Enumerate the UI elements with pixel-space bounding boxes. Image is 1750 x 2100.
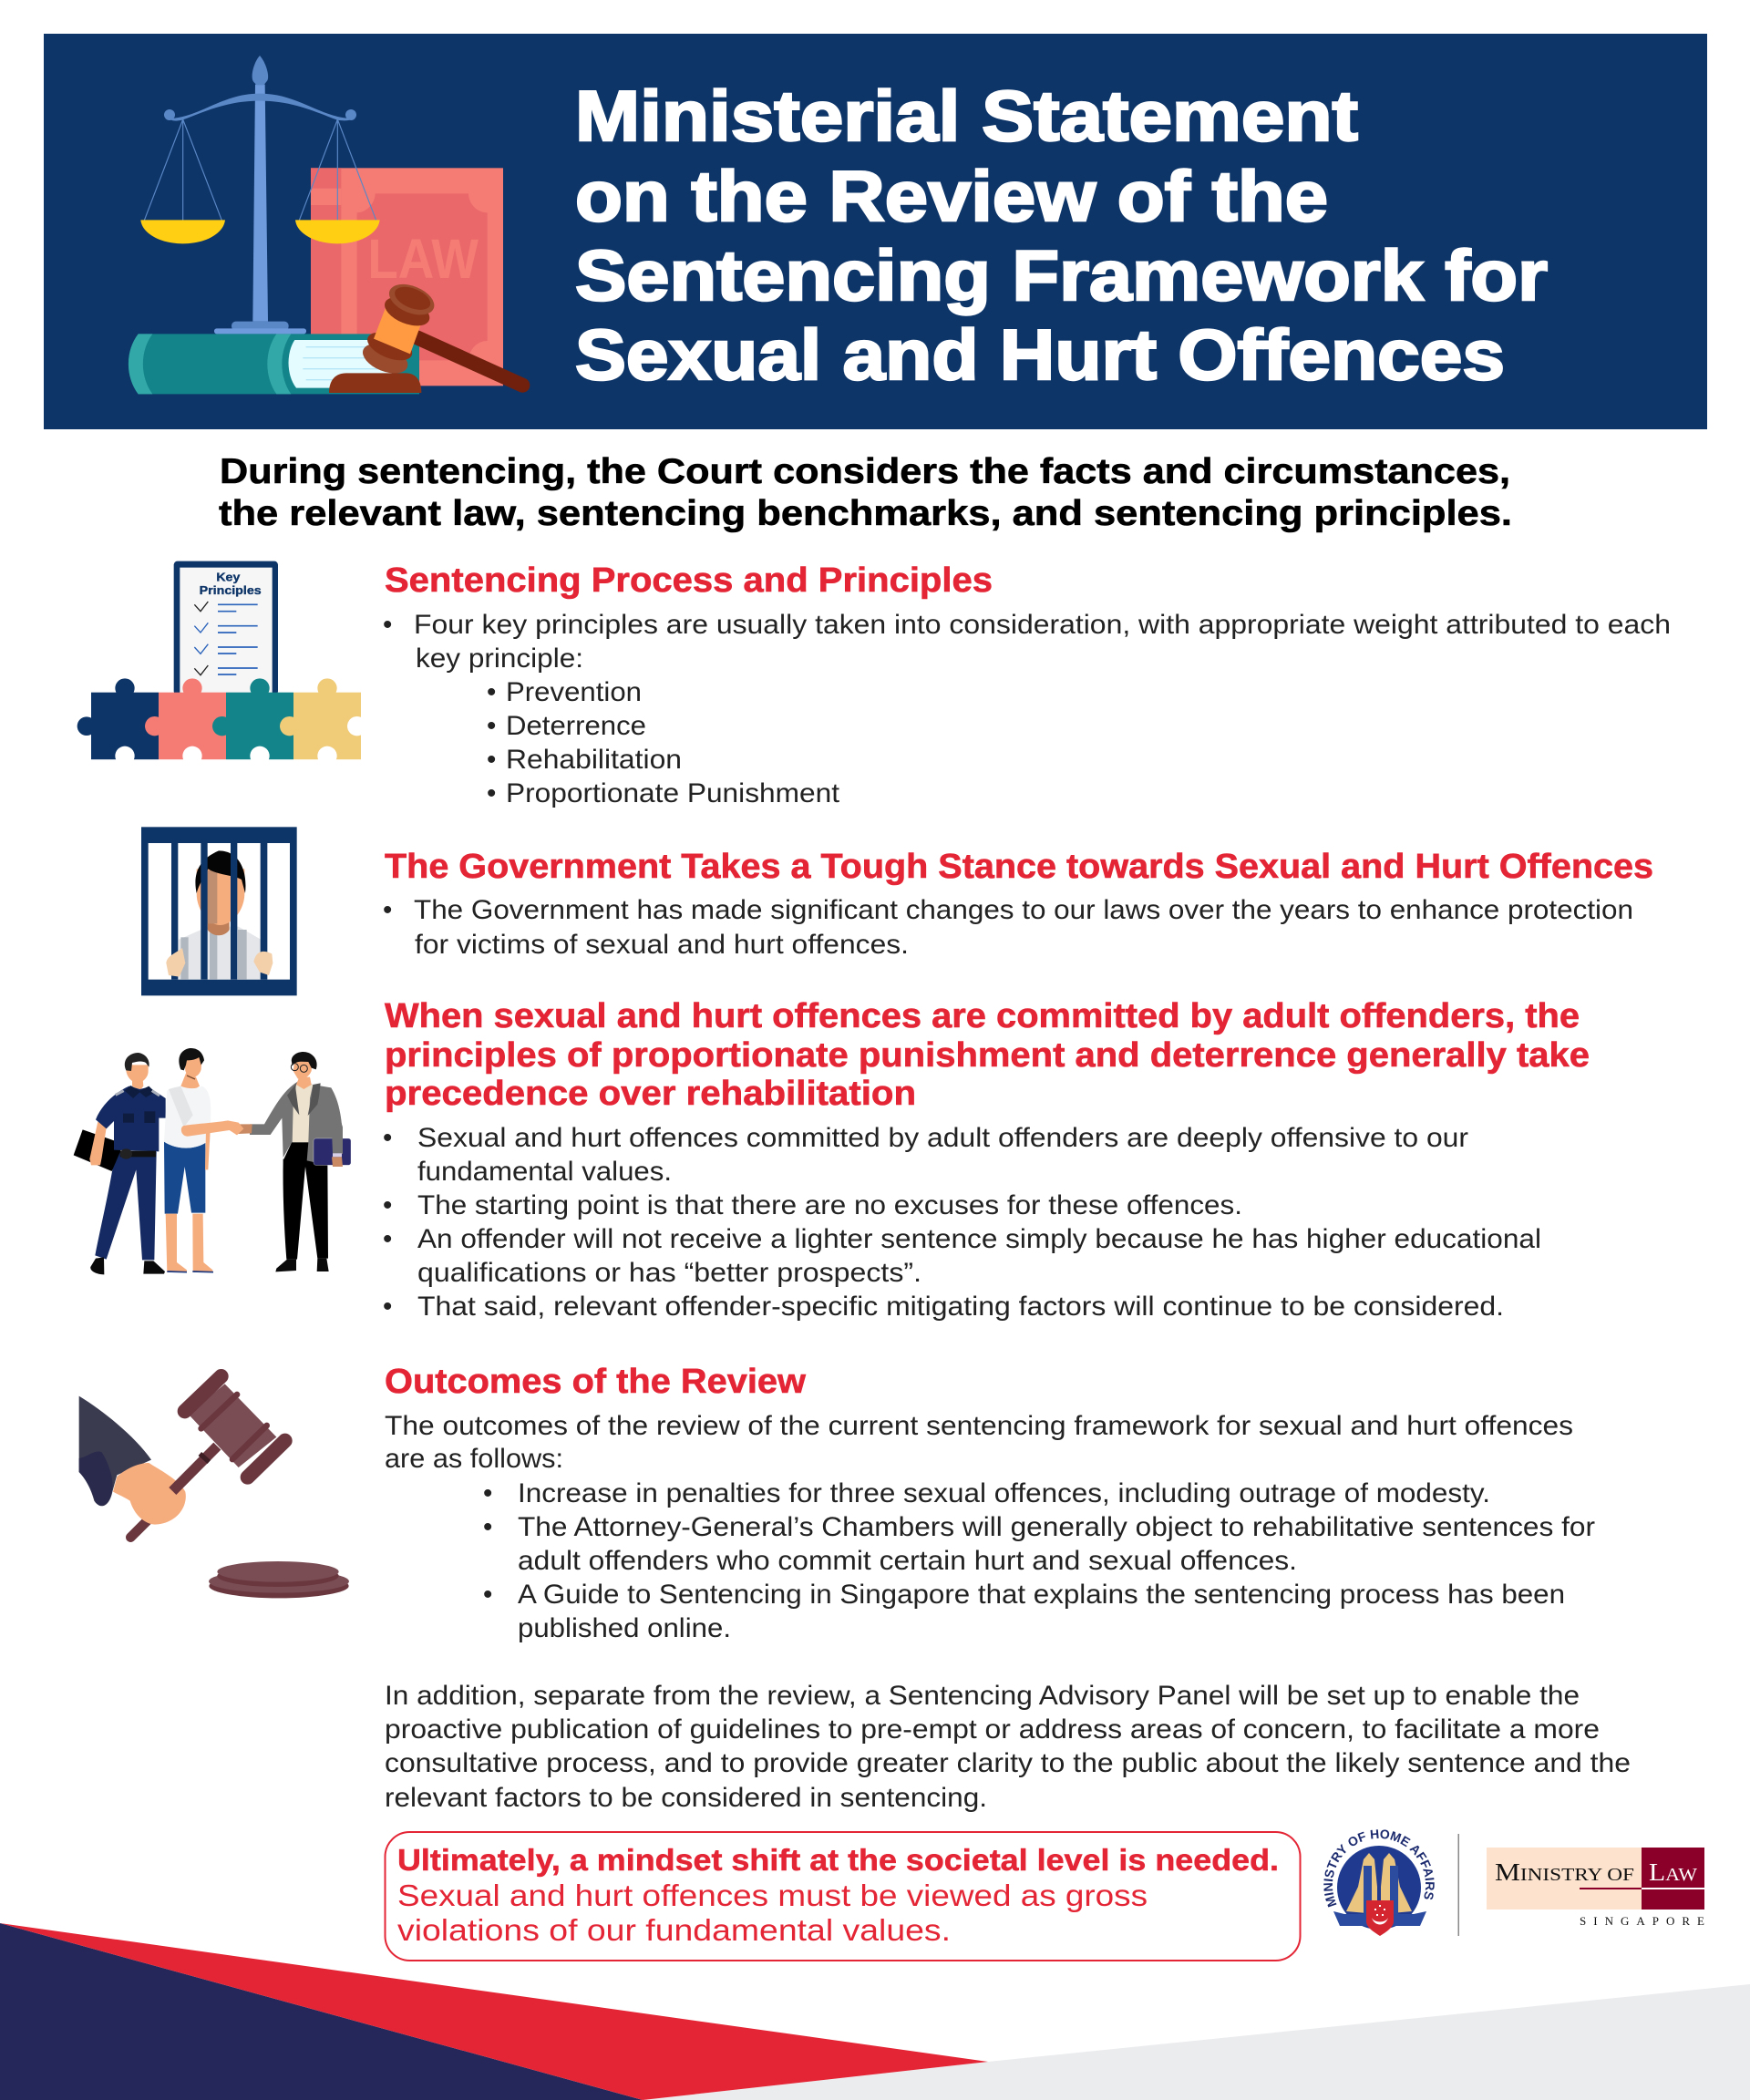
section: sentencing process and principles <box>383 561 1671 808</box>
intro text <box>385 1411 1573 1474</box>
offender <box>164 1048 213 1272</box>
bullet list: • <box>487 677 496 707</box>
bullet list: • <box>383 610 392 640</box>
icon: man behind bars <box>141 827 297 995</box>
intro statement: During sentencing, the Court considers the facts and circumstances, <box>220 452 1510 491</box>
title: on the Review of the <box>575 156 1328 236</box>
callout: Sexual and hurt offences must be viewed as gross <box>397 1879 1148 1912</box>
heading: principles of proportionate punishment and deterrence generally take <box>385 1036 1590 1075</box>
icon: scales, law book, gavel: LAW <box>367 228 479 291</box>
outcomes list <box>483 1478 1595 1643</box>
section: outcomes of the review <box>385 1363 1631 1813</box>
bullet list: Deterrence <box>506 711 646 741</box>
intro statement: the relevant law, sentencing benchmarks, and sentencing principles. <box>219 494 1512 533</box>
logo: Ministry of Law: SINGAPORE <box>1580 1914 1704 1928</box>
section: adult offenders <box>383 997 1590 1322</box>
icon: hand with gavel <box>79 1376 349 1598</box>
bullet text <box>383 895 1633 960</box>
bullet list: The starting point is that there are no excuses for these offences. <box>417 1190 1242 1220</box>
icon: officer, offender and lawyer shaking hands <box>74 1048 351 1274</box>
advisory panel paragraph <box>385 1681 1631 1813</box>
callout: Ultimately, a mindset shift at the societal level is needed. <box>397 1843 1279 1877</box>
bullet list: Prevention <box>506 677 642 707</box>
bullet list: qualifications or has “better prospects”. <box>417 1258 921 1288</box>
icon: key principles checklist and puzzle <box>77 561 374 768</box>
bullet list: That said, relevant offender-specific mitigating factors will continue to be considered. <box>417 1292 1504 1322</box>
bullet list: fundamental values. <box>417 1157 672 1187</box>
title: Sexual and Hurt Offences <box>575 314 1505 395</box>
logo: Ministry of Law: LAW <box>1649 1858 1697 1886</box>
bullet list: • <box>383 1190 392 1220</box>
logo: Ministry of Law: MINISTRY OF <box>1495 1858 1634 1886</box>
section: tough stance <box>383 848 1653 960</box>
outcomes list: • <box>483 1580 492 1610</box>
advisory panel paragraph: relevant factors to be considered in sentencing. <box>385 1783 987 1813</box>
icon: key principles checklist and puzzle: Principles <box>200 584 262 597</box>
heading: When sexual and hurt offences are committed by adult offenders, the <box>385 997 1580 1035</box>
bullet list <box>383 610 1671 808</box>
advisory panel paragraph: consultative process, and to provide greater clarity to the public about the likely sentence and the <box>385 1748 1631 1778</box>
outcomes list: published online. <box>518 1613 731 1643</box>
icon: key principles checklist and puzzle: Key <box>216 571 240 583</box>
lawyer <box>250 1052 351 1271</box>
outcomes list: adult offenders who commit certain hurt and sexual offences. <box>518 1546 1297 1576</box>
advisory panel paragraph: proactive publication of guidelines to pre-empt or address areas of concern, to facilitate a more <box>385 1714 1600 1745</box>
heading: The Government Takes a Tough Stance towards Sexual and Hurt Offences <box>385 848 1653 886</box>
heading: Outcomes of the Review <box>385 1363 806 1401</box>
title: Ministerial Statement <box>575 76 1358 156</box>
heading: precedence over rehabilitation <box>385 1075 916 1113</box>
outcomes list: • <box>483 1512 492 1542</box>
intro statement <box>219 452 1512 533</box>
title: Sentencing Framework for <box>575 235 1548 315</box>
bullet list: • <box>487 745 496 775</box>
bullet text: • <box>383 895 392 925</box>
bullet list <box>383 1123 1541 1322</box>
divider between logos <box>1458 1834 1459 1936</box>
bullet list: • <box>487 711 496 741</box>
callout: violations of our fundamental values. <box>397 1913 951 1947</box>
heading <box>385 997 1590 1113</box>
outcomes list: • <box>483 1478 492 1508</box>
bullet list: Proportionate Punishment <box>506 778 839 808</box>
outcomes list: A Guide to Sentencing in Singapore that explains the sentencing process has been <box>518 1580 1565 1610</box>
logo: Ministry of Law <box>1487 1848 1704 1928</box>
intro text: are as follows: <box>385 1444 563 1474</box>
heading: Sentencing Process and Principles <box>385 561 993 600</box>
bullet text: The Government has made significant changes to our laws over the years to enhance protection <box>414 895 1633 925</box>
bullet list: key principle: <box>416 643 583 674</box>
bullet list: An offender will not receive a lighter sentence simply because he has higher educational <box>417 1224 1541 1254</box>
title <box>575 76 1548 395</box>
bullet list: Four key principles are usually taken into consideration, with appropriate weight attributed to each <box>414 610 1671 640</box>
bullet list: • <box>383 1224 392 1254</box>
handshake <box>181 1120 252 1137</box>
intro text: The outcomes of the review of the current sentencing framework for sexual and hurt offences <box>385 1411 1573 1441</box>
callout <box>385 1832 1300 1961</box>
outcomes list: Increase in penalties for three sexual offences, including outrage of modesty. <box>518 1478 1490 1508</box>
bottom decorative triangles <box>0 1923 1750 2100</box>
bullet text: for victims of sexual and hurt offences. <box>415 930 909 960</box>
bullet list: • <box>383 1123 392 1153</box>
bullet list: Rehabilitation <box>506 745 682 775</box>
officer <box>74 1053 166 1274</box>
icon: scales, law book, gavel <box>129 56 522 394</box>
bullet list: • <box>383 1292 392 1322</box>
logo: Ministry of Home Affairs: MINISTRY OF HOME AFFAIRS <box>1323 1829 1435 1907</box>
bullet list: • <box>487 778 496 808</box>
bullet list: Sexual and hurt offences committed by adult offenders are deeply offensive to our <box>417 1123 1468 1153</box>
outcomes list: The Attorney-General’s Chambers will generally object to rehabilitative sentences for <box>518 1512 1595 1542</box>
advisory panel paragraph: In addition, separate from the review, a Sentencing Advisory Panel will be set up to enable the <box>385 1681 1580 1711</box>
header banner <box>44 34 1707 429</box>
